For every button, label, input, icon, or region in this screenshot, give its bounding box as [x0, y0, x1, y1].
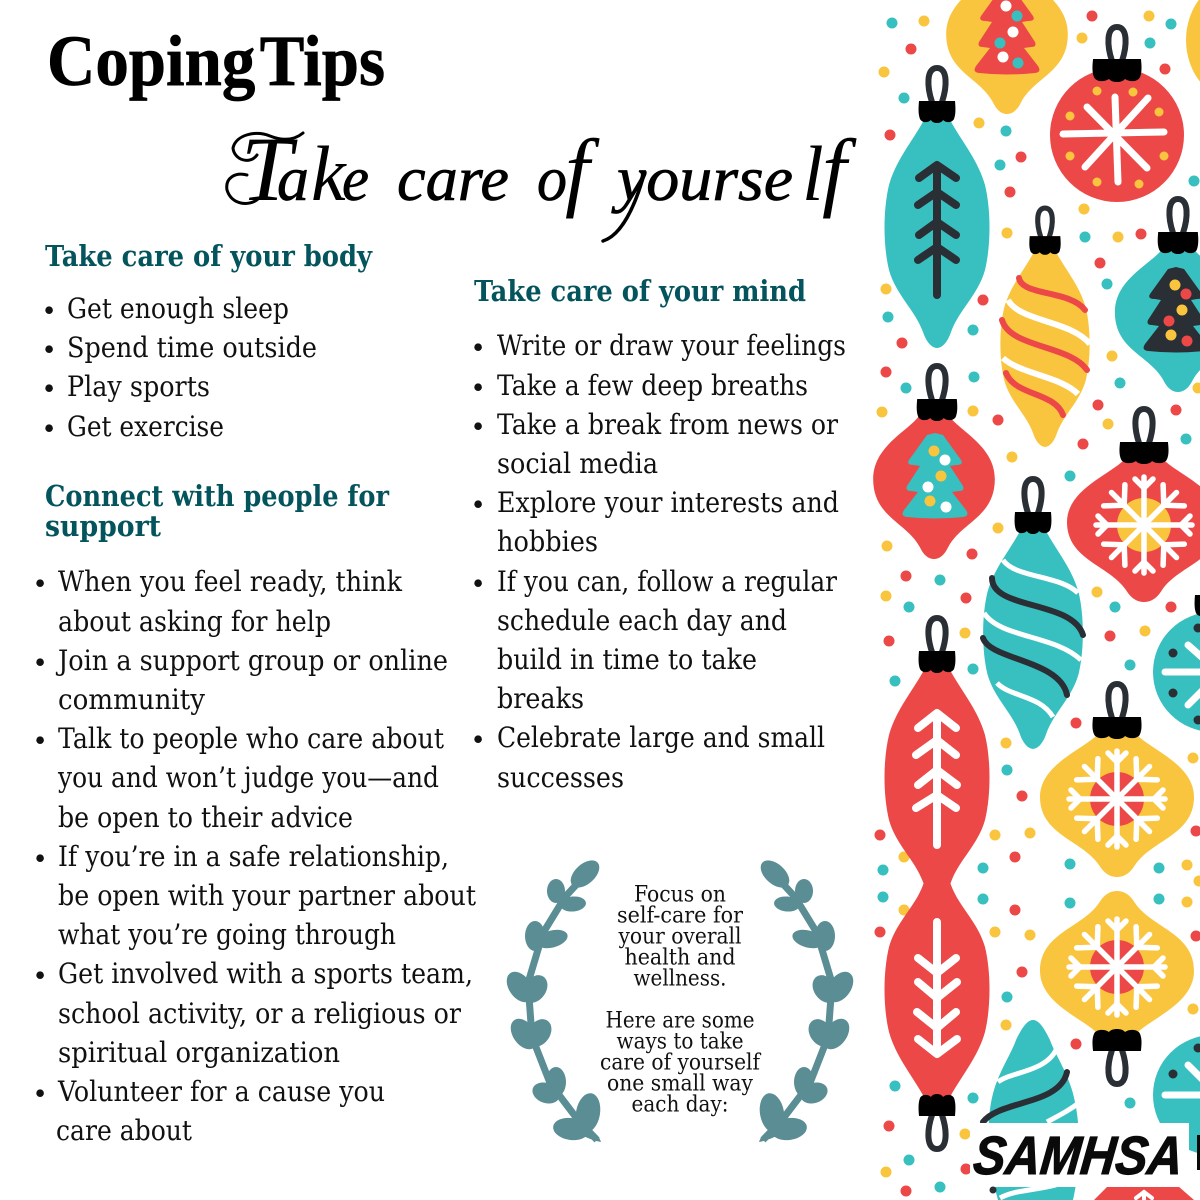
list: mind tips: hobbies: [497, 525, 598, 558]
list: mind tips: [472, 329, 846, 794]
list: mind tips: •: [472, 721, 484, 757]
callout text: Here are some: [606, 1008, 754, 1034]
ornament: teal striped: [983, 479, 1083, 749]
list: connect tips: be open with your partner about: [58, 879, 477, 912]
callout text: self-care for: [617, 904, 743, 928]
list: mind tips: Explore your interests and: [497, 486, 839, 519]
ornament: teal onion with dark tree: [1115, 199, 1200, 392]
ornament: teal long with dark fir: [884, 68, 990, 348]
script subtitle: l: [802, 130, 824, 217]
list: mind tips: successes: [497, 761, 624, 794]
script subtitle: o: [537, 143, 567, 214]
list: mind tips: •: [472, 369, 484, 405]
list: connect tips: •: [34, 644, 46, 680]
list: body tips: Spend time outside: [67, 331, 317, 364]
callout text: [600, 882, 762, 1118]
ornament: teal ball right, lower: [1153, 1035, 1200, 1155]
list: connect tips: •: [34, 722, 46, 758]
callout text: wellness.: [634, 966, 726, 992]
ornament: yellow drop with red tree: [946, 0, 1068, 114]
panel: take care of your body: [44, 239, 373, 446]
list: body tips: •: [44, 370, 55, 406]
list: connect tips: spiritual organization: [58, 1036, 340, 1069]
ornament: yellow onion with snowflake, upper: [1040, 684, 1194, 877]
callout text: one small way: [607, 1072, 754, 1096]
heading: mind: Take care of your mind: [474, 274, 806, 308]
callout text: ways to take: [616, 1030, 744, 1054]
list: connect tips: what you’re going through: [58, 918, 396, 951]
list: mind tips: •: [472, 486, 484, 522]
list: body tips: Get enough sleep: [67, 292, 289, 325]
ornament: red long with white fir, lower: [884, 869, 990, 1149]
script subtitle: [227, 118, 857, 241]
list: connect tips: Talk to people who care about: [58, 722, 445, 755]
title: Coping Tips: [47, 21, 385, 101]
ornament: red onion with teal tree: [873, 366, 995, 559]
list: connect tips: community: [58, 683, 205, 716]
callout text: your overall: [618, 924, 742, 950]
list: mind tips: breaks: [497, 682, 584, 715]
script subtitle: e: [342, 143, 369, 214]
panel: take care of your mind: [472, 274, 846, 794]
ornament: teal ball right: [1153, 595, 1200, 732]
list: mind tips: •: [472, 329, 484, 365]
script subtitle: care: [397, 143, 509, 214]
list: connect tips: you and won’t judge you—and: [57, 761, 439, 794]
panel: connect with people: [34, 479, 477, 1147]
confetti dots: yellow: [876, 10, 1200, 1178]
list: mind tips: schedule each day and: [497, 604, 787, 637]
list: connect tips: be open to their advice: [58, 801, 353, 834]
list: body tips: •: [44, 410, 55, 446]
list: mind tips: •: [472, 565, 484, 601]
list: connect tips: •: [34, 1075, 46, 1111]
callout text: care of yourself: [600, 1050, 762, 1076]
callout text: health and: [624, 946, 736, 970]
ornament: teal striped, lower clipped: [983, 1020, 1080, 1200]
list: mind tips: social media: [497, 447, 658, 480]
list: connect tips: Join a support group or online: [55, 644, 448, 677]
list: connect tips: about asking for help: [58, 605, 331, 638]
list: mind tips: Write or draw your feelings: [497, 329, 846, 362]
list: body tips: •: [44, 292, 55, 328]
script subtitle: T: [241, 118, 298, 220]
callout text: Focus on: [634, 882, 726, 908]
ornament: yellow striped: [1000, 208, 1090, 447]
callout text: each day:: [632, 1092, 728, 1118]
ornament: red ball with white star: [1050, 27, 1184, 202]
list: body tips: Get exercise: [67, 410, 224, 443]
heading: connect: [45, 479, 390, 543]
confetti dots: red: [874, 10, 1200, 1196]
list: mind tips: Celebrate large and small: [497, 721, 825, 754]
list: connect tips: Volunteer for a cause you: [57, 1075, 385, 1108]
list: body tips: •: [44, 331, 55, 367]
ornament: yellow oval top right: [1186, 0, 1200, 102]
list: connect tips: school activity, or a religious or: [58, 997, 462, 1030]
list: body tips: [44, 292, 317, 446]
ornament: red onion with snowflake: [1067, 409, 1200, 602]
list: connect tips: [34, 565, 477, 1147]
list: mind tips: If you can, follow a regular: [497, 565, 838, 598]
list: mind tips: Take a break from news or: [497, 408, 839, 441]
list: mind tips: Take a few deep breaths: [497, 369, 808, 402]
list: connect tips: If you’re in a safe relationship,: [58, 840, 449, 873]
heading: connect: Connect with people for: [45, 479, 390, 513]
panel: ornament pattern: [873, 0, 1200, 1200]
confetti dots: teal: [878, 18, 1200, 1192]
list: connect tips: Get involved with a sports team,: [58, 957, 473, 990]
ornament: red long with white fir, upper: [884, 618, 990, 898]
script subtitle: a: [277, 143, 309, 214]
list: connect tips: •: [34, 957, 46, 993]
callout: laurel wreath with text: [501, 855, 859, 1142]
script subtitle: f: [565, 123, 600, 220]
icon: left laurel: [501, 855, 604, 1142]
list: connect tips: •: [34, 840, 46, 876]
list: connect tips: care about: [56, 1114, 193, 1147]
list: body tips: Play sports: [67, 370, 210, 403]
heading: connect: support: [45, 509, 162, 543]
ornament: yellow onion with snowflake, lower: [1040, 891, 1194, 1084]
list: mind tips: •: [472, 408, 484, 444]
heading: body: Take care of your body: [45, 239, 373, 273]
script subtitle: f: [822, 123, 857, 220]
list: connect tips: When you feel ready, think: [58, 565, 403, 598]
icon: right laurel: [756, 855, 859, 1142]
ornament: red onion bottom clipped: [1094, 1186, 1194, 1200]
script subtitle: yourse: [611, 143, 793, 214]
list: connect tips: •: [34, 565, 46, 601]
list: mind tips: build in time to take: [497, 643, 757, 676]
script subtitle: k: [311, 130, 347, 217]
